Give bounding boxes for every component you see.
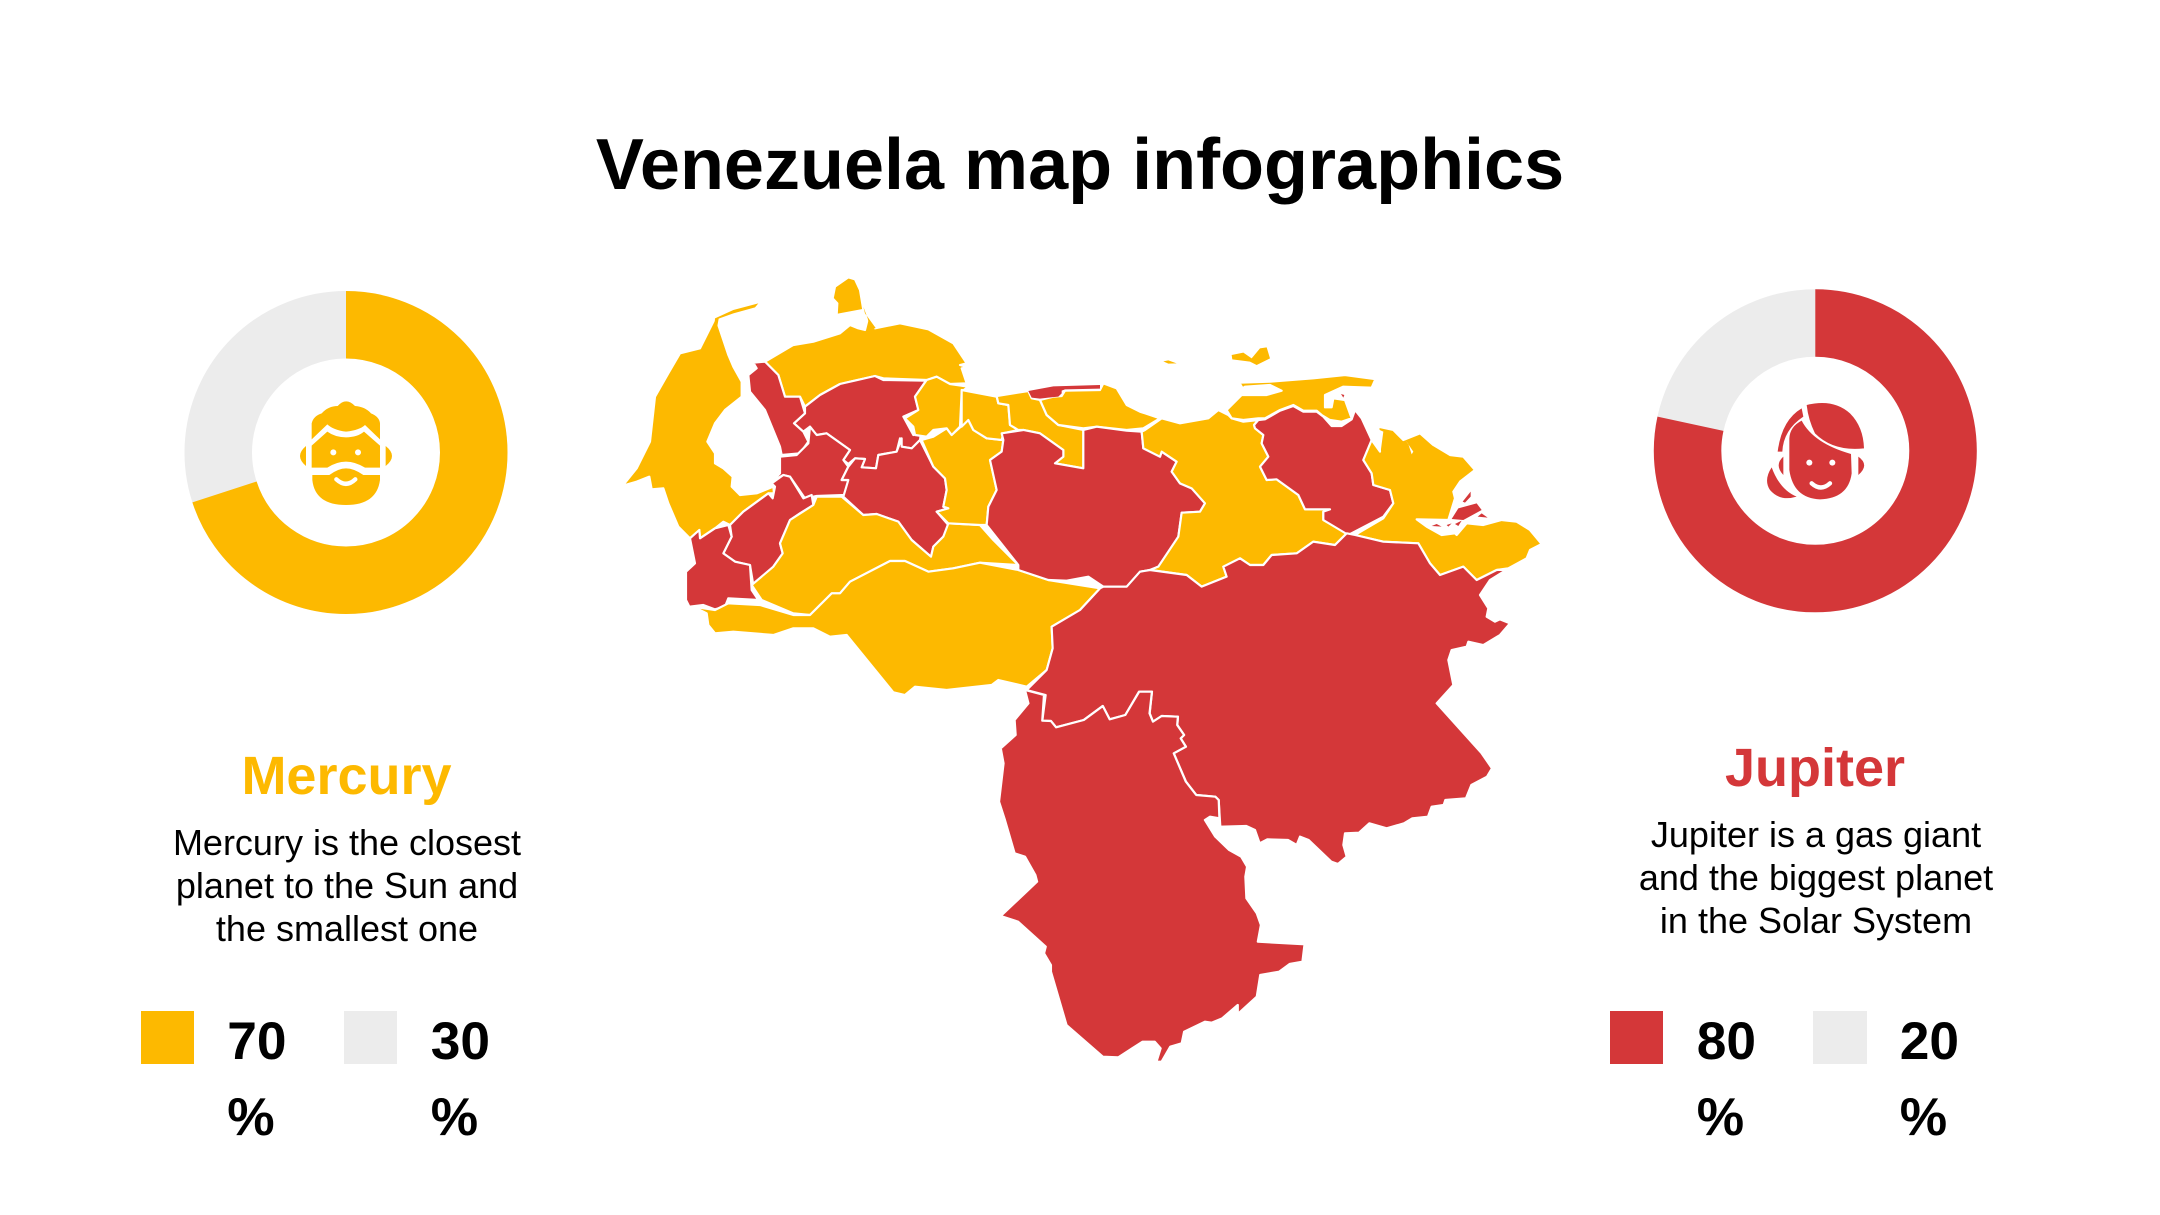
region: Aragua [997, 391, 1083, 468]
heading: Jupiter: Jupiter [1725, 738, 1905, 798]
icon: woman [1767, 403, 1864, 499]
region: Paraguana peninsula [833, 277, 863, 315]
text: Mercury description: Mercury is the closest [173, 822, 521, 863]
region: Miranda [1040, 383, 1160, 430]
region: Amazonas [999, 690, 1305, 1062]
legend: 30%: % [431, 1088, 478, 1147]
region: Anzoategui [1142, 410, 1347, 587]
region: Falcon [765, 317, 968, 407]
legend: 70%: % [227, 1088, 275, 1147]
delta islets [1341, 394, 1488, 527]
legend: 20%: 20 [1900, 1012, 1959, 1071]
region: small island [1163, 360, 1177, 364]
region: Guarico [987, 427, 1205, 587]
region: Barinas [752, 497, 1018, 615]
region: Bolivar [1027, 533, 1510, 864]
donut chart: Mercury 70% [218, 325, 474, 580]
region: Portuguesa [842, 438, 948, 557]
legend: 30% [344, 1011, 490, 1147]
legend: 80%: 80 [1697, 1012, 1756, 1071]
region: Merida [723, 475, 813, 585]
text: Mercury description: the smallest one [216, 908, 478, 949]
region: western lake strip [748, 362, 808, 455]
title: Venezuela map infographics [596, 125, 1564, 205]
region: Cojedes [922, 420, 1003, 525]
legend: 30%: 30 [431, 1012, 490, 1071]
text: Mercury description [173, 822, 521, 949]
text: Jupiter description: Jupiter is a gas giant [1651, 814, 1981, 855]
region: Zulia [623, 318, 774, 538]
heading: Mercury: Mercury [241, 746, 452, 806]
region: Sucre [1227, 375, 1402, 422]
icon: bearded man [300, 401, 392, 505]
legend: 20% [1813, 1011, 1959, 1147]
text: Mercury description: planet to the Sun and [176, 865, 518, 906]
legend: 80% [1610, 1011, 1756, 1147]
text: Jupiter description [1639, 814, 1993, 941]
region: Yaracuy [905, 377, 968, 437]
map: Venezuela [623, 277, 1542, 1062]
legend: 20%: % [1900, 1088, 1947, 1147]
coast details: thin peninsula and isthmus [715, 303, 876, 330]
region: Tachira [686, 525, 758, 609]
region: Vargas [1028, 385, 1100, 399]
region: Trujillo [772, 427, 850, 498]
panel: Mercury [141, 325, 521, 1147]
text: Jupiter description: and the biggest planet [1639, 857, 1993, 898]
region: Carabobo [962, 390, 1018, 440]
legend: 70% [141, 1011, 286, 1147]
region: Delta Amacuro [1355, 427, 1542, 580]
panel: Jupiter [1610, 323, 1993, 1147]
region: Lara [794, 376, 926, 468]
delta channels [1378, 429, 1413, 454]
legend: 80%: % [1697, 1088, 1744, 1147]
region: Apure [693, 561, 1100, 695]
region: Monagas [1254, 406, 1393, 535]
text: Jupiter description: in the Solar System [1660, 900, 1972, 941]
donut chart: Jupiter 80% [1688, 323, 1943, 579]
region: Nueva Esparta island [1232, 347, 1270, 365]
legend: 70%: 70 [227, 1012, 286, 1071]
